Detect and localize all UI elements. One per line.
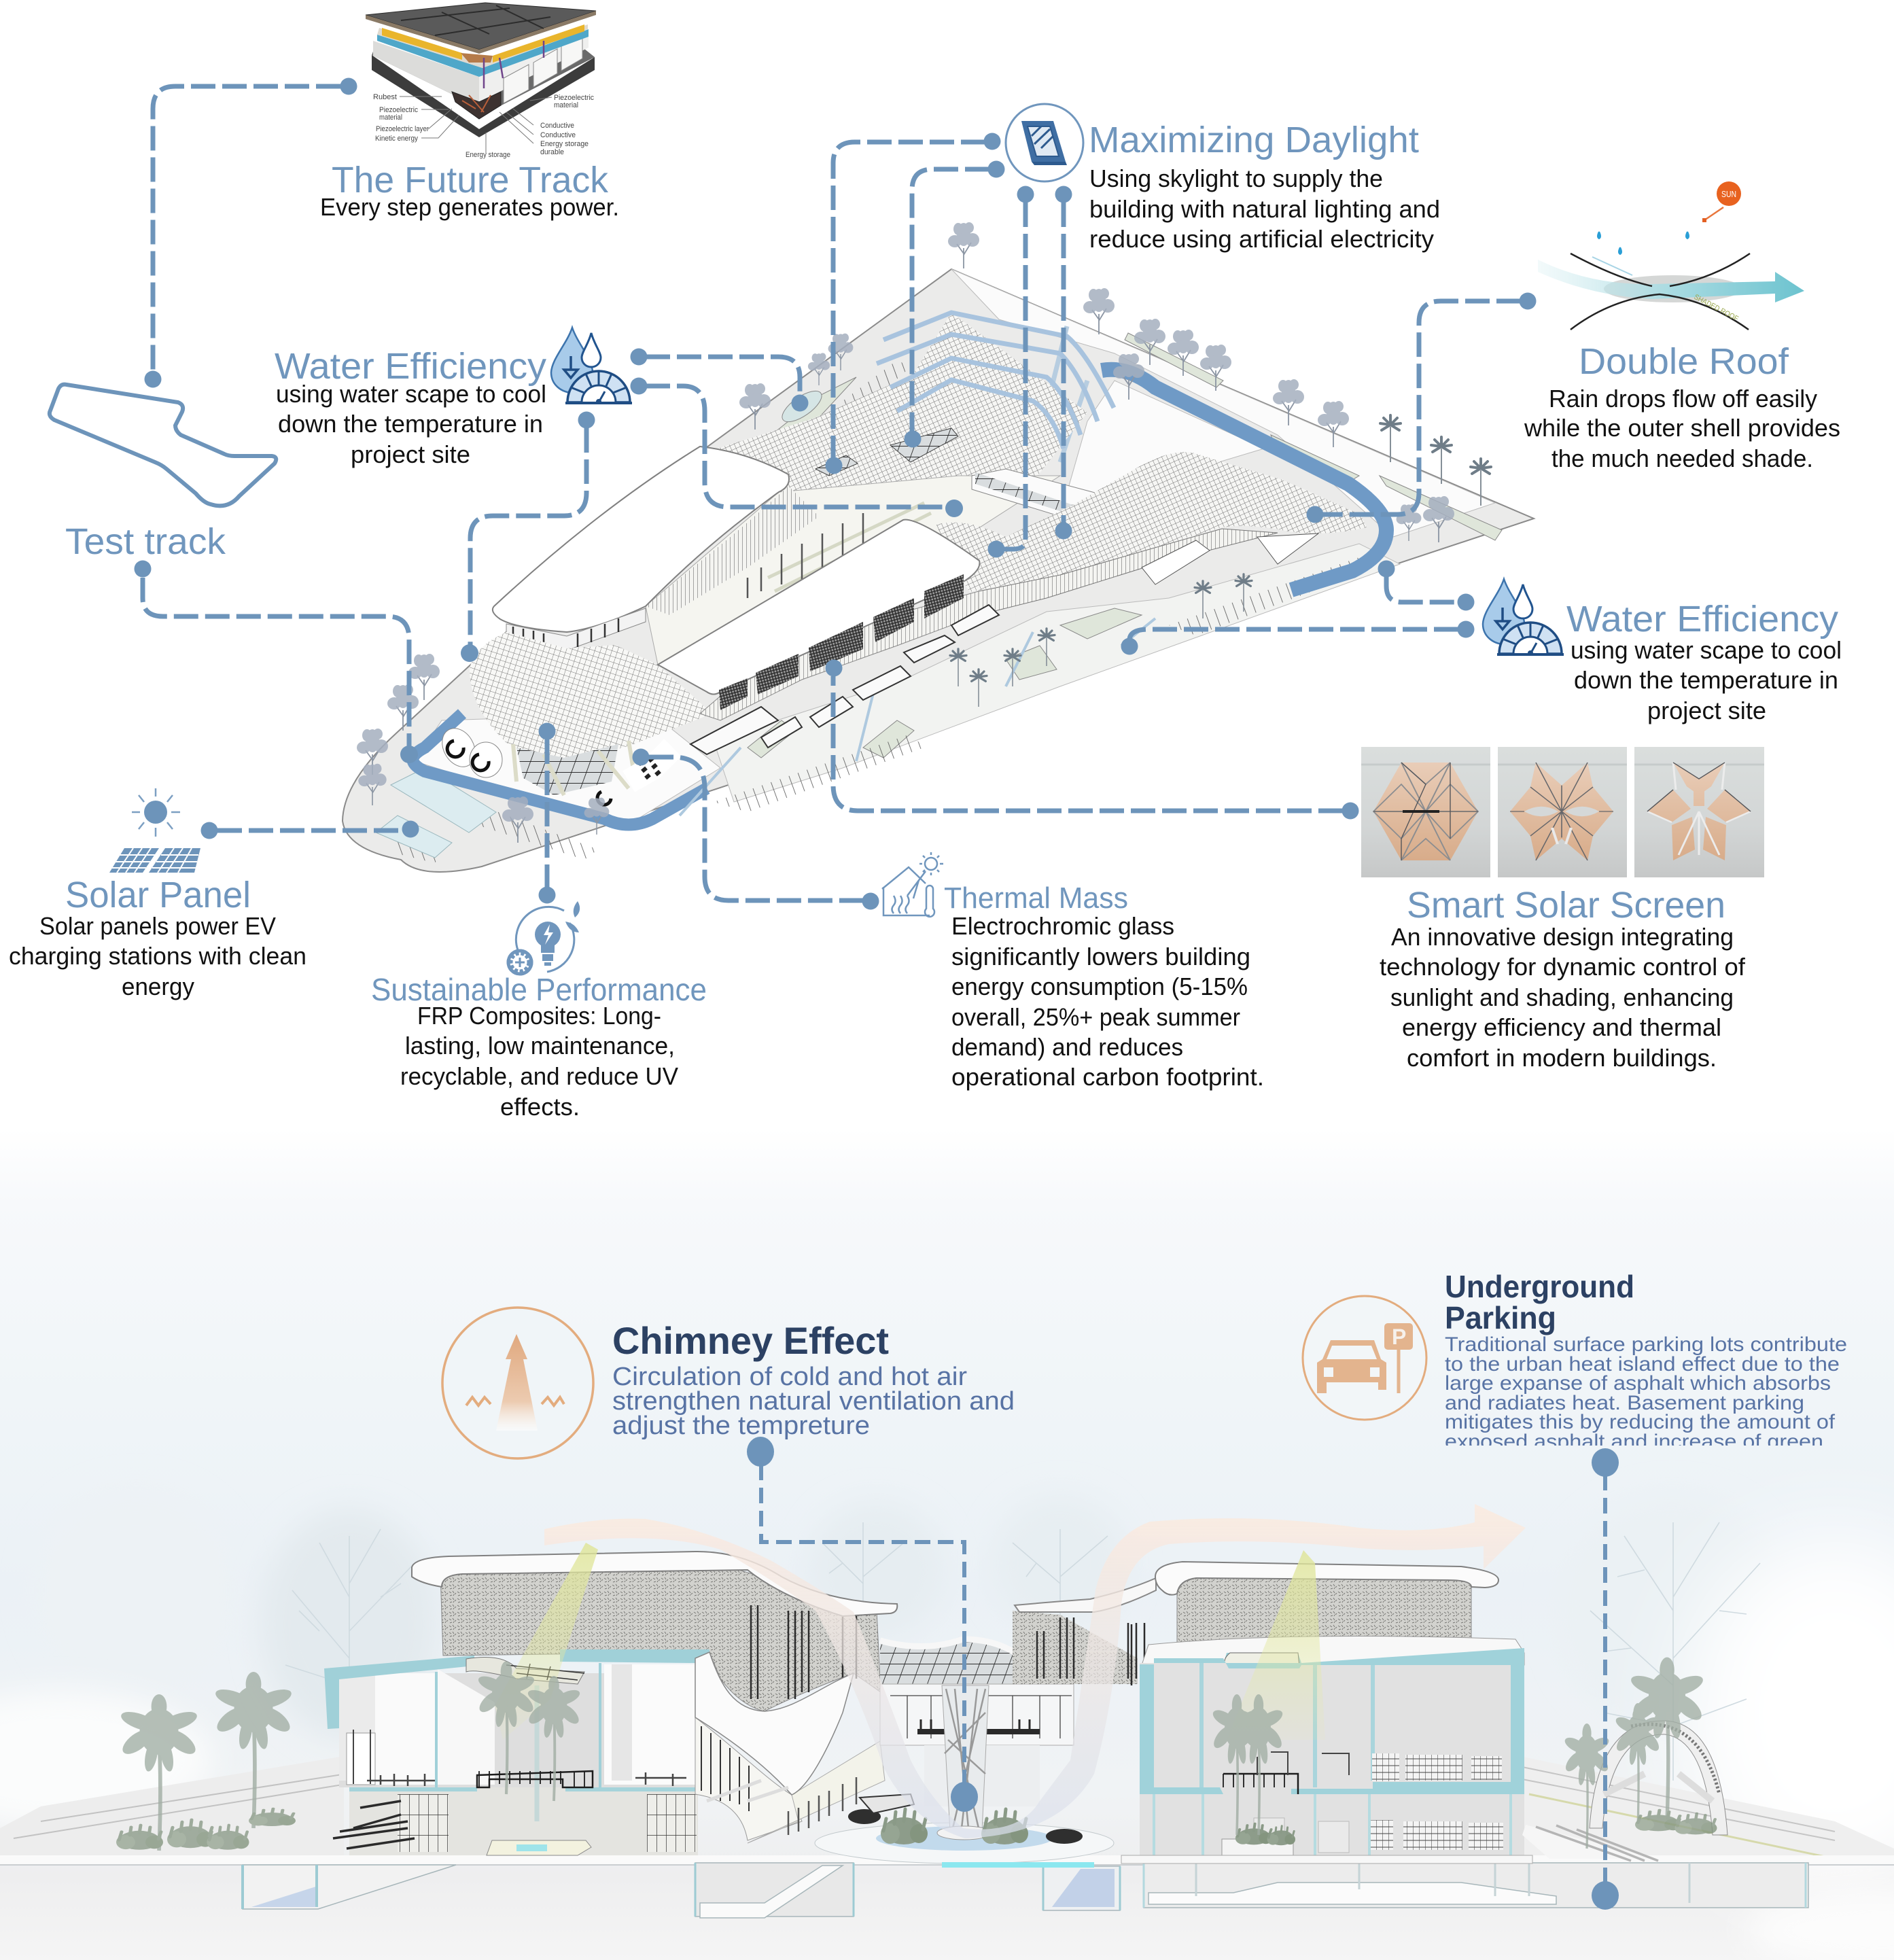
layered road diagram [366,3,596,137]
panel: isometric site plan [343,222,1534,872]
description: the much needed shade. [1551,444,1813,472]
panel: chimney effect [442,1308,1015,1458]
white plazas [415,269,1495,822]
solar parking canopies [376,768,496,858]
site ground [343,269,1534,872]
diagram leader labels: durable [540,148,564,156]
description: adjust the tempreture [612,1412,870,1440]
description: sunlight and shading, enhancing [1390,983,1734,1011]
entrance arch [1590,1721,1728,1835]
connector: left water efficiency lower [631,378,963,517]
icon: car and parking sign in circle [1303,1296,1426,1420]
heading: Maximizing Daylight [1089,120,1419,160]
panel: thermal mass [882,852,1264,1091]
description: lasting, low maintenance, [405,1032,675,1060]
description: using water scape to cool [276,380,546,408]
faint tree branches [285,1522,1760,1781]
diagram leader labels: Kinetic energy [375,135,418,143]
description: technology for dynamic control of [1380,953,1746,981]
skylights [816,428,958,476]
description: overall, 25%+ peak summer [951,1003,1240,1031]
description: recyclable, and reduce UV [400,1062,678,1090]
description: charging stations with clean [9,942,306,970]
icon: house, sun and thermometer [882,852,943,917]
heading: Test track [65,521,226,562]
connector: left water efficiency upper [631,348,809,412]
description: Using skylight to supply the [1089,164,1383,192]
icon: track outline [50,385,276,506]
description: demand) and reduces [951,1033,1183,1061]
diagram leader labels: Piezoelectric [554,94,594,102]
heading: Solar Panel [65,875,251,915]
description: Traditional surface parking lots contribute [1445,1333,1847,1356]
heading: Chimney Effect [612,1319,889,1362]
diagram leader labels: Energy storage [540,140,589,148]
connector: future track to test track [144,77,357,387]
icon: chimney arrow in circle [442,1308,593,1458]
description: operational carbon footprint. [951,1063,1264,1091]
description: building with natural lighting and [1089,195,1440,223]
heading: Thermal Mass [944,881,1128,915]
heading: Water Efficiency [275,346,546,387]
basement parking levels [243,1863,1808,1918]
heading: Sustainable Performance [371,972,707,1007]
description: comfort in modern buildings. [1407,1044,1717,1072]
ground and roads [0,1756,1894,1866]
panel: double roof [1524,181,1840,472]
heading: The Future Track [332,160,609,200]
fin skirt along left roof [646,486,819,615]
light shafts [495,1543,1325,1740]
panel: water efficiency right [1483,579,1842,724]
description: down the temperature in [278,410,543,438]
connector: test track to site [135,560,418,763]
air flow arrow [544,1504,1526,1838]
panel: maximizing daylight [1006,104,1440,253]
curved white shell and mid facade [333,1652,885,1849]
description: to the urban heat island effect due to the [1445,1353,1840,1376]
wave roof openings [1142,533,1318,584]
description: strengthen natural ventilation and [612,1387,1015,1416]
description: Electrochromic glass [951,912,1174,940]
description [9,912,306,1000]
wave skirt to front shell [700,591,979,720]
connector: smart solar screen [825,659,1359,820]
description: Every step generates power. [320,193,619,221]
trees [357,222,1491,843]
connector: right water efficiency lower [1121,621,1475,655]
panel: solar panel [9,788,306,1000]
panel: underground parking [1303,1269,1847,1453]
ring water channel [413,326,1386,825]
long white roof, left [493,447,789,632]
panel: smart solar screen [1361,747,1764,1072]
heading: Underground [1445,1269,1634,1304]
description: Circulation of cold and hot air [612,1363,967,1391]
diagram leader labels: Rubest [373,93,397,101]
description [1571,636,1842,724]
description [276,380,546,468]
connector: daylight to skylight two [904,160,1004,447]
double roof diagram: SUN [1721,189,1736,199]
parking bays [387,360,1366,863]
double roof diagram: SHADED ROOF [1693,293,1740,323]
description: project site [1647,697,1766,724]
description: reduce using artificial electricity [1089,225,1434,253]
connector: left water efficiency to shell [461,412,595,662]
left roof front windows [506,608,646,650]
palms and shrubs [116,1657,1717,1851]
planters [748,333,1502,758]
icon: sun [132,788,180,837]
panel: section view of the building [0,1504,1894,1918]
icon: skylight in circle [1006,104,1083,181]
screen module photos [1361,747,1764,877]
entrance glazing and columns [436,722,673,805]
panel: water efficiency left [275,328,632,468]
panel: the future track [320,3,619,221]
diagram leader labels: Piezoelectric [379,106,418,114]
description: effects. [500,1093,580,1121]
diagram leader labels: Conductive [540,122,574,130]
connector: daylight to skylight four [1055,186,1072,540]
connector: solar panel [201,821,419,839]
description: Rain drops flow off easily [1549,385,1817,413]
upper mesh roof [713,313,1087,512]
panel: test track [50,385,276,562]
icon: car and parking sign in circle: P [1392,1325,1406,1349]
description: using water scape to cool [1571,636,1842,664]
connector: right water efficiency upper [1378,560,1475,610]
description: energy efficiency and thermal [1402,1013,1721,1041]
connector: underground parking [1592,1448,1619,1910]
connector: double roof [1306,292,1536,523]
heading: Double Roof [1579,341,1789,382]
description [951,912,1264,1091]
panel: section background mist [0,1128,1894,1960]
description: An innovative design integrating [1391,923,1734,951]
dark screen facade panels [719,574,964,710]
furniture and rails [477,1771,593,1787]
connector: daylight to skylight three [988,186,1034,557]
description: large expanse of asphalt which absorbs [1445,1372,1831,1395]
connector: thermal mass [632,749,879,909]
diagram leader labels [373,93,594,159]
description [1524,385,1840,472]
connectors [135,77,1619,1910]
panel: sustainable performance [371,901,707,1121]
auditorium seats [1372,1753,1399,1781]
connector: chimney effect [747,1437,978,1812]
heading: Smart Solar Screen [1407,885,1725,926]
teal roof frame [324,1656,474,1729]
central plaza canopy, gallery and lattice tower [815,1578,1156,1868]
description [1089,164,1440,253]
description: energy consumption (5-15% [951,973,1248,1000]
description: FRP Composites: Long- [417,1002,661,1030]
front sunken light wells [690,605,999,754]
description [400,1002,678,1121]
description: and radiates heat. Basement parking [1445,1392,1804,1414]
description: exposed asphalt and increase of green [1445,1431,1823,1453]
central white roof [658,520,979,695]
canopy ribs [877,313,1114,449]
left upper roof and textured wall [412,1552,897,1711]
description: project site [351,440,470,468]
icon: water and gauge [1483,579,1564,656]
description: significantly lowers building [951,943,1250,970]
description: Solar panels power EV [39,912,276,940]
left lower block [324,1649,709,1855]
front mesh shell [470,632,712,758]
description: while the outer shell provides [1524,414,1840,442]
right block: auditorium [1121,1562,1658,1863]
bridge building [972,469,1108,527]
diagram leader labels: Energy storage [466,151,510,159]
wave mesh roof [936,452,1367,592]
description: mitigates this by reducing the amount of [1445,1411,1836,1433]
connector: sustainable performance [538,723,556,904]
icon: water and gauge [551,328,632,404]
description [1445,1333,1847,1453]
icon: bulb, gear and leaf [508,901,580,974]
description [1380,923,1746,1072]
description [612,1363,1015,1440]
heading: Parking [1445,1300,1556,1335]
diagram leader labels: material [554,101,578,109]
description: energy [122,973,194,1000]
middle corridor [646,476,1060,665]
double roof diagram [1538,181,1804,330]
diagram leader labels: material [379,113,402,122]
diagram leader labels: Piezoelectric layer [376,125,429,133]
cars [848,1809,881,1824]
heading: Water Efficiency [1566,599,1838,640]
heading [1445,1269,1634,1335]
description: down the temperature in [1574,666,1838,694]
icon: solar panels [109,848,200,873]
diagram leader labels: Conductive [540,131,576,139]
connector: daylight to skylight one [825,133,1000,474]
